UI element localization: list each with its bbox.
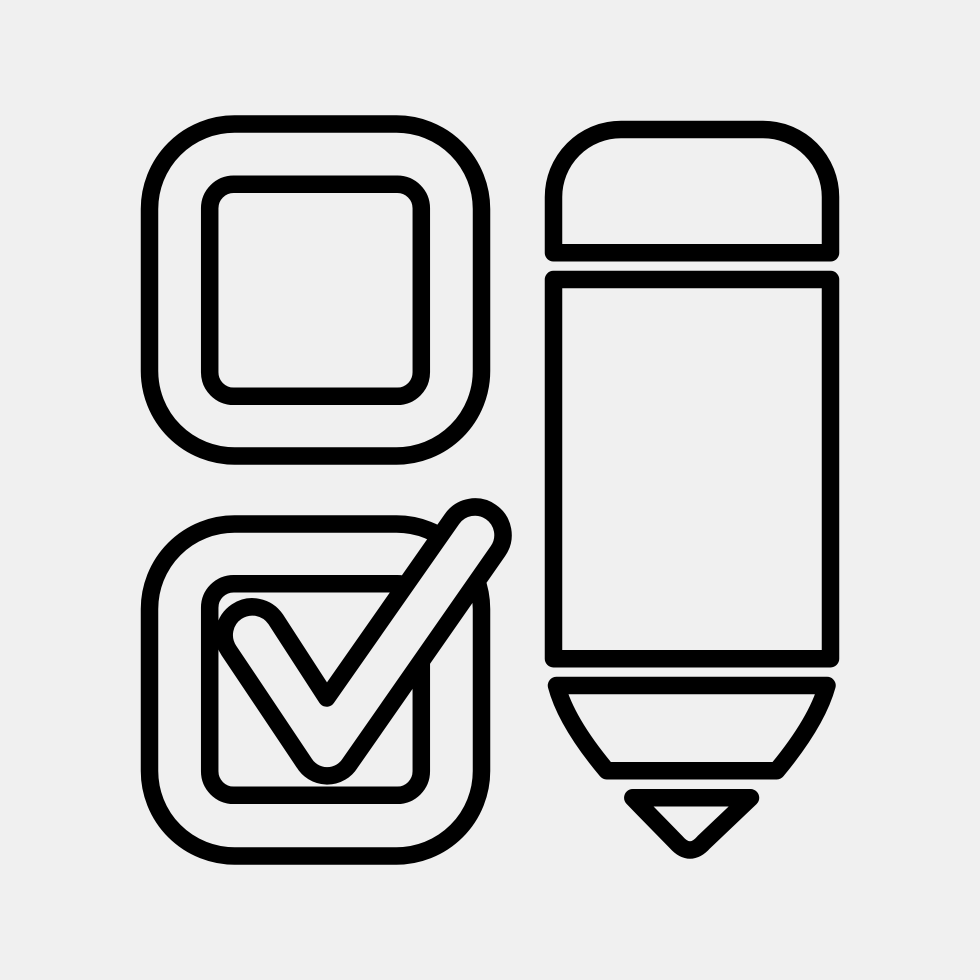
pencil: eraser xyxy=(554,130,830,253)
pencil: tip xyxy=(633,798,750,850)
check mark xyxy=(224,507,503,776)
top checkbox: outer frame xyxy=(150,124,482,456)
bottom checkbox: inner square xyxy=(210,584,421,795)
top checkbox: inner square xyxy=(210,184,421,396)
pencil: body xyxy=(554,280,830,659)
pencil: sharpened section xyxy=(556,686,827,771)
bottom checkbox: outer frame xyxy=(150,524,482,856)
